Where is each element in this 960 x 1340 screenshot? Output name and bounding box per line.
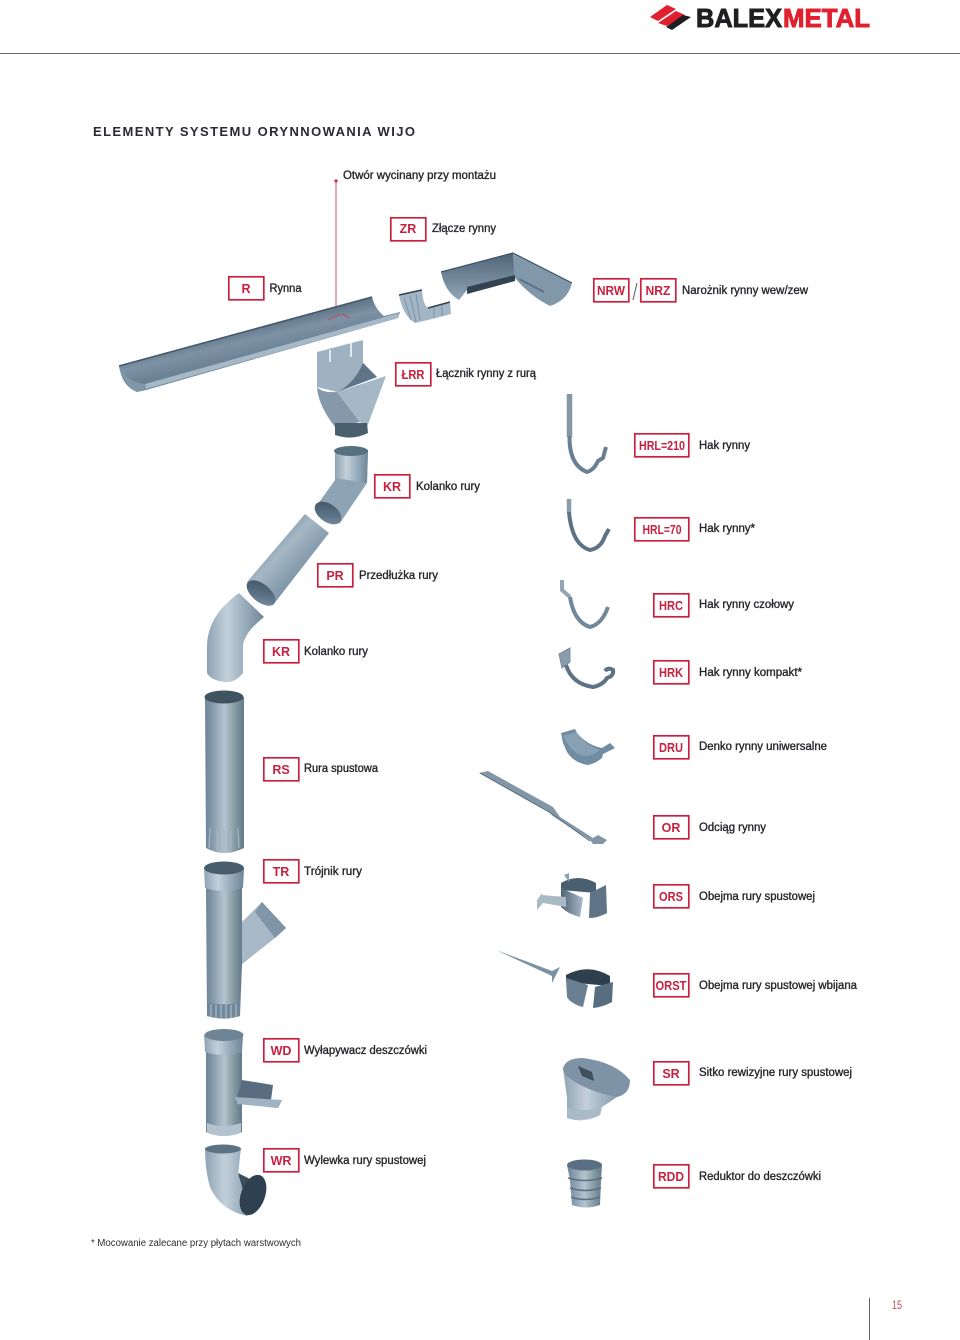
icon: gutter R [119,297,400,392]
label: HRL=210 [635,434,750,457]
page number: 15 [892,1300,902,1312]
logo: Balexmetal: BALEX [696,5,782,33]
icon: outlet connector ŁRR [317,340,386,438]
label: HRL=70 [635,518,756,541]
label: ORS: ORS [659,890,683,904]
icon: elbow KR lower [207,593,264,682]
label: HRL=210: HRL=210 [639,439,685,453]
label: ZR: ZR [400,222,416,236]
label: KR lower [264,640,368,663]
label: R [229,277,302,300]
label: KR lower: Kolanko rury [304,646,368,658]
label: RDD [654,1165,821,1188]
label: KR upper: Kolanko rury [416,481,480,493]
icon: inspection strainer SR [563,1058,630,1120]
label: HRL=210: Hak rynny [699,440,750,452]
label: DRU: DRU [659,741,683,755]
label: NRW / NRZ: Narożnik rynny wew/zew [682,285,809,297]
label: WD: WD [271,1044,291,1058]
label: WR: Wylewka rury spustowej [304,1155,426,1167]
label: TR [264,860,362,883]
icon: pipe clamp ORS [537,873,607,918]
icon: gutter corner NRW / NRZ [441,253,572,306]
label: SR [654,1062,852,1085]
label: HRK [654,661,803,684]
label: ORST [654,974,858,997]
callout: hole cut during assembly [334,170,496,314]
label: ŁRR [396,363,537,386]
icon: nail clamp ORST [496,950,613,1008]
label: KR upper: KR [383,480,401,494]
label: PR: Przedłużka rury [359,570,438,582]
label: OR: Odciąg rynny [699,822,766,834]
icon: downpipe RS [204,690,244,853]
icon: hook HRL=210 [569,394,606,472]
label: WR [264,1149,426,1172]
icon: hook HRK [559,648,613,687]
label: HRL=70: HRL=70 [642,523,682,537]
label: SR: Sitko rewizyjne rury spustowej [699,1067,852,1079]
label: ŁRR: Łącznik rynny z rurą [436,368,537,380]
label: KR lower: KR [272,645,290,659]
label: ZR [391,218,496,241]
icon: elbow KR upper [311,446,368,529]
label: HRC: Hak rynny czołowy [699,599,794,611]
label: SR: SR [662,1067,680,1081]
label: ORS [654,885,815,908]
icon: end cap DRU [561,729,615,765]
label: RS [264,758,379,781]
icon: tee TR [204,862,286,1019]
icon: gutter connector ZR [399,290,451,323]
label: WD: Wyłapywacz deszczówki [304,1045,427,1057]
icon: hook HRC [562,580,608,627]
label: R: R [241,282,251,296]
label: ORST: ORST [656,979,687,993]
label: NRW / NRZ: NRW [597,284,625,298]
label: RDD: RDD [658,1170,684,1184]
label: KR upper [375,475,480,498]
label: RS: Rura spustowa [304,763,379,775]
icon: rain collector WD [204,1029,282,1136]
label: OR: OR [662,821,680,835]
label: ZR: Złącze rynny [432,223,496,235]
icon: gutter bracket OR [479,771,607,844]
logo: Balexmetal [650,5,870,33]
icon: reducer RDD [567,1160,602,1208]
label: TR: Trójnik rury [304,866,362,878]
label: WR: WR [271,1154,291,1168]
icon: outlet elbow WR [205,1144,271,1219]
label: RS: RS [272,763,290,777]
icon: extension pipe PR [242,514,329,611]
label: DRU [654,736,827,759]
label: HRC [654,594,794,617]
label: ORS: Obejma rury spustowej [699,891,815,903]
callout: hole cut during assembly: Otwór wycinany przy montażu [343,170,496,182]
label: WD [264,1039,427,1062]
logo: Balexmetal: METAL [783,5,870,33]
label: HRL=70: Hak rynny* [699,523,756,535]
label: NRW / NRZ [594,279,809,302]
footnote: * Mocowanie zalecane przy płytach warstwowych [91,1238,301,1249]
label: TR: TR [273,865,289,879]
label: OR [654,816,766,839]
label: HRK: HRK [659,666,683,680]
label: PR [318,564,438,587]
label: HRK: Hak rynny kompakt* [699,667,803,679]
label: ORST: Obejma rury spustowej wbijana [699,980,858,992]
icon: hook HRL=70 [569,499,609,550]
label: ŁRR: ŁRR [402,368,424,382]
label: DRU: Denko rynny uniwersalne [699,741,827,753]
label: PR: PR [326,569,344,583]
label: R: Rynna [270,283,302,295]
label: HRC: HRC [659,599,683,613]
title: ELEMENTY SYSTEMU ORYNNOWANIA WIJO [93,124,415,139]
label: NRW / NRZ: NRZ [646,284,671,298]
label: RDD: Reduktor do deszczówki [699,1171,821,1183]
page number [870,1298,902,1340]
